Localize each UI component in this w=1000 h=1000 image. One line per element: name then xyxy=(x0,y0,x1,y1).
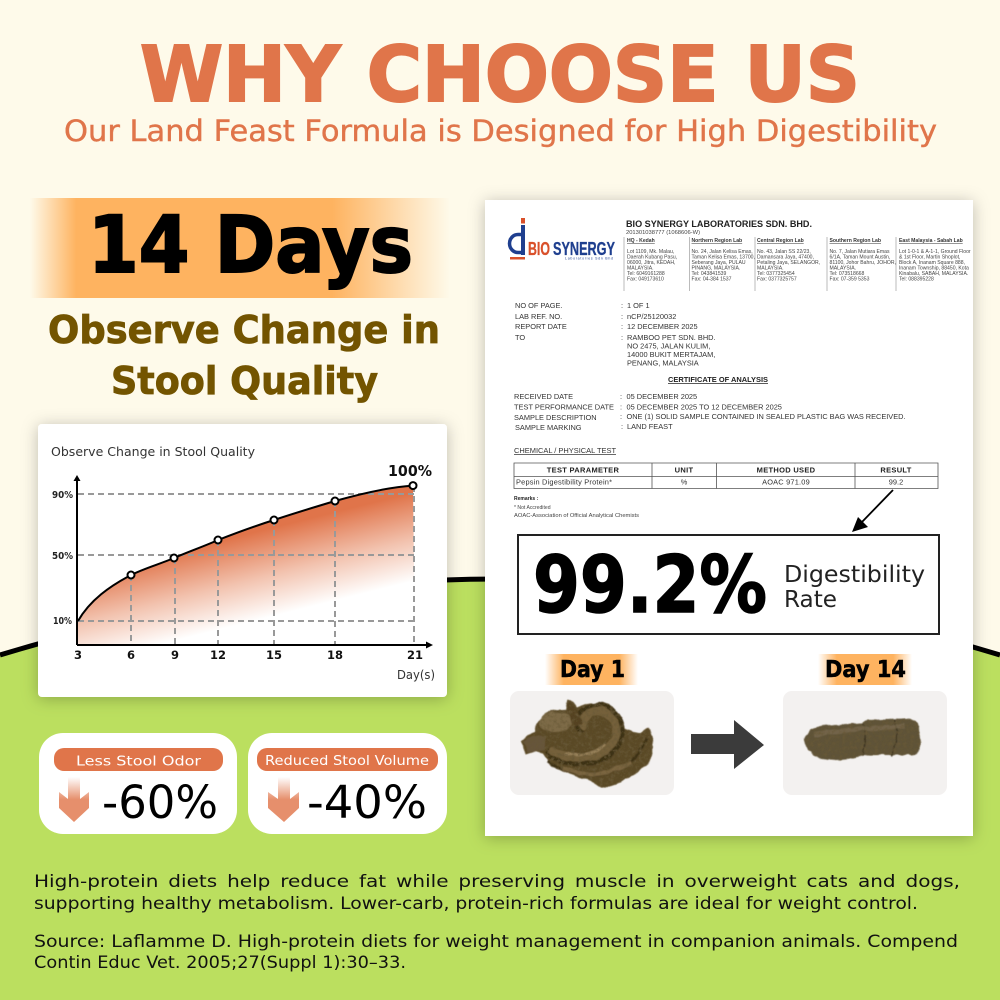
report details: : xyxy=(621,312,623,321)
sample details: 05 DECEMBER 2025 TO 12 DECEMBER 2025 xyxy=(626,402,782,412)
paragraph: source: Source: Laflamme D. High-protein diets for weight management in companion animals. Compend xyxy=(34,932,958,952)
lab address columns: Northern Region Lab xyxy=(692,238,742,244)
lab address columns: Tel: 088395228 xyxy=(899,276,934,282)
lab address columns: No. 24, Jalan Kelisa Emas, xyxy=(692,249,753,255)
sample details: RECEIVED DATE xyxy=(514,392,573,401)
label: day 14: Day 14 xyxy=(825,657,906,683)
lab address columns: MALAYSIA. xyxy=(830,266,856,272)
sample details: SAMPLE MARKING xyxy=(515,423,582,432)
lab address columns: 06000, Jitra, KEDAH, xyxy=(627,260,675,266)
panel: lab certificate xyxy=(485,200,973,836)
label: day 1: Day 1 xyxy=(560,657,625,683)
x axis labels: 18 xyxy=(327,648,343,662)
lab address columns: Damansara Jaya, 47400, xyxy=(757,255,814,261)
panel: line chart card xyxy=(38,424,447,697)
section heading: CHEMICAL / PHYSICAL TEST xyxy=(514,446,616,455)
photo: day 1 stool xyxy=(510,691,674,795)
title: WHY CHOOSE US xyxy=(140,31,860,120)
lab address columns: Petaling Jaya, SELANGOR, xyxy=(757,260,820,266)
lab address columns: East Malaysia - Sabah Lab xyxy=(899,238,963,244)
registration number: 201301038777 (1068606-W) xyxy=(626,230,700,236)
lab address columns: 6/1A, Taman Mount Austin, xyxy=(830,255,890,261)
y axis labels: 90% xyxy=(52,490,73,501)
background green hill xyxy=(0,579,1000,1000)
icon: bio synergy logo: SYNERGY xyxy=(553,239,615,259)
lab address columns: Daerah Kubang Pasu, xyxy=(627,255,677,261)
lab name: BIO SYNERGY LABORATORIES SDN. BHD. xyxy=(626,219,812,230)
lab address columns: Fax: 07-359 5353 xyxy=(830,276,870,282)
lab address columns: Fax: 04-384 1537 xyxy=(692,276,732,282)
lab address columns: No. 7, Jalan Mutiara Emas xyxy=(830,249,890,255)
results table: RESULT xyxy=(880,466,912,474)
lab address columns: Fax: 0377325757 xyxy=(757,276,797,282)
sample details: LAND FEAST xyxy=(627,422,673,431)
axes xyxy=(74,475,433,648)
lab address columns: Tel: 043841539 xyxy=(692,271,727,277)
lab address columns: Southern Region Lab xyxy=(830,238,881,244)
heading: observe change: Observe Change in xyxy=(48,308,440,352)
report details: 14000 BUKIT MERTAJAM, xyxy=(627,350,715,359)
lab address columns: Lot 1-0-1 & A-1-1, Ground Floor xyxy=(899,249,971,255)
sample details: : xyxy=(620,412,622,421)
sample details: SAMPLE DESCRIPTION xyxy=(514,413,597,422)
results table xyxy=(514,463,938,488)
chart title: Observe Change in Stool Quality xyxy=(51,444,256,459)
sample details: 05 DECEMBER 2025 xyxy=(626,392,697,401)
paragraph: benefits: High-protein diets help reduce fat while preserving muscle in overweight cats and dogs, xyxy=(34,872,960,892)
paragraph: source: Contin Educ Vet. 2005;27(Suppl 1):30–33. xyxy=(34,953,406,973)
report details: NO OF PAGE. xyxy=(515,301,562,310)
lab address columns: & 1st Floor, Martin Shoplot, xyxy=(899,255,960,261)
arrow to result box xyxy=(852,490,893,532)
lab address columns: Seberang Jaya, PULAU xyxy=(692,260,746,266)
report details: TO xyxy=(515,333,525,342)
label: day 1 xyxy=(545,654,638,685)
stat card: reduced stool volume: Reduced Stool Volume xyxy=(265,754,429,769)
y axis labels: 10% xyxy=(53,616,72,627)
lab address columns: PINANG, MALAYSIA. xyxy=(692,266,740,272)
results table: AOAC 971.09 xyxy=(762,478,810,486)
data points xyxy=(128,482,416,578)
remarks: AOAC-Association of Official Analytical Chemists xyxy=(514,513,640,519)
remarks: Remarks : xyxy=(514,496,539,502)
lab address columns: 81100, Johor Bahru, JOHOR, xyxy=(830,260,896,266)
stat card: less stool odor: Less Stool Odor xyxy=(76,754,202,770)
x axis labels: 12 xyxy=(210,648,226,662)
report details: REPORT DATE xyxy=(515,322,567,331)
y axis labels xyxy=(52,490,73,627)
x axis labels xyxy=(74,648,423,662)
report details: : xyxy=(621,333,623,342)
lab address columns: No. 43, Jalan SS 22/23, xyxy=(757,249,811,255)
sample details: TEST PERFORMANCE DATE xyxy=(514,402,614,412)
x axis labels: 15 xyxy=(266,648,282,662)
lab address columns: Lot 1109, Mk. Malau, xyxy=(627,249,674,255)
sample details: : xyxy=(621,422,623,431)
stat card: reduced stool volume: -40% xyxy=(307,776,427,829)
report details: PENANG, MALAYSIA xyxy=(627,358,699,368)
report details xyxy=(515,301,716,368)
lab address columns: HQ - Kedah xyxy=(627,238,655,244)
callout: digestibility rate xyxy=(518,535,939,634)
x axis labels: 3 xyxy=(74,648,82,662)
photo: day 14 stool xyxy=(783,691,947,795)
sample details xyxy=(514,392,906,432)
stat card: less stool odor xyxy=(39,733,237,834)
report details: : xyxy=(621,322,623,331)
axis unit: Day(s) xyxy=(397,667,435,682)
stat card: reduced stool volume xyxy=(248,733,447,834)
callout: digestibility rate: Digestibility xyxy=(784,562,925,588)
x axis labels: 9 xyxy=(171,648,179,662)
results table: Pepsin Digestibility Protein* xyxy=(516,478,612,486)
curve line xyxy=(78,486,413,621)
lab address columns: Block A, Inanam Square 888, xyxy=(899,260,965,266)
y axis labels: 50% xyxy=(52,551,73,562)
heading: observe change xyxy=(48,308,440,403)
callout: digestibility rate: Rate xyxy=(784,587,837,613)
paragraph: benefits: supporting healthy metabolism. Lower-carb, protein-rich formulas are ideal for weight control. xyxy=(34,894,918,914)
lab address columns: Taman Kelisa Emas, 13700, xyxy=(692,255,755,261)
icon: bio synergy logo: BIO xyxy=(528,239,550,259)
lab address columns: Tel: 6049161288 xyxy=(627,271,665,277)
paragraph: source xyxy=(34,932,958,973)
results table: TEST PARAMETER xyxy=(547,466,619,474)
sample details: : xyxy=(620,402,622,412)
lab address columns: Tel: 0377325454 xyxy=(757,271,795,277)
report details: 1 OF 1 xyxy=(627,301,650,310)
paragraph: benefits xyxy=(34,872,960,914)
lab address columns: Kinabalu, SABAH, MALAYSIA. xyxy=(899,271,968,277)
lab address columns: MALAYSIA. xyxy=(757,266,784,272)
certificate heading: CERTIFICATE OF ANALYSIS xyxy=(668,375,768,384)
report details: LAB REF. NO. xyxy=(515,312,562,321)
remarks xyxy=(514,496,640,519)
lab address columns: Tel: 073518668 xyxy=(830,271,865,277)
lab address columns: Fax: 049173610 xyxy=(627,276,664,282)
14 days banner: 14 Days xyxy=(88,201,413,291)
sample details: : xyxy=(620,392,622,401)
report details: 12 DECEMBER 2025 xyxy=(627,322,698,331)
subtitle: Our Land Feast Formula is Designed for High Digestibility xyxy=(64,114,937,148)
icon: bio synergy logo xyxy=(510,218,615,260)
x axis labels: 6 xyxy=(127,648,135,662)
lab address columns: MALAYSIA. xyxy=(627,266,654,272)
results table: UNIT xyxy=(675,466,693,474)
lab address columns xyxy=(624,237,971,291)
lab address columns: Central Region Lab xyxy=(757,238,804,244)
stat card: less stool odor: -60% xyxy=(102,776,218,829)
report details: nCP/25120032 xyxy=(627,312,676,321)
callout: digestibility rate: 99.2% xyxy=(533,541,767,631)
report details: RAMBOO PET SDN. BHD. xyxy=(627,333,716,342)
sample details: ONE (1) SOLID SAMPLE CONTAINED IN SEALED PLASTIC BAG WAS RECEIVED. xyxy=(626,412,906,421)
results table: 99.2 xyxy=(889,478,903,486)
report details: NO 2475, JALAN KULIM, xyxy=(627,342,710,350)
100% label: 100% xyxy=(388,462,432,480)
x axis labels: 21 xyxy=(407,648,423,662)
lab address columns: Inanam Township, 88450, Kota xyxy=(899,266,969,272)
area fill xyxy=(78,486,415,645)
results table: % xyxy=(681,478,688,486)
results table: METHOD USED xyxy=(757,466,816,474)
remarks: * Not Accredited xyxy=(514,505,551,511)
heading: observe change: Stool Quality xyxy=(111,359,378,403)
report details: : xyxy=(621,301,623,310)
arrow: day 1 to day 14 xyxy=(691,720,764,769)
icon: bio synergy logo: Laboratories Sdn Bhd xyxy=(565,256,613,260)
